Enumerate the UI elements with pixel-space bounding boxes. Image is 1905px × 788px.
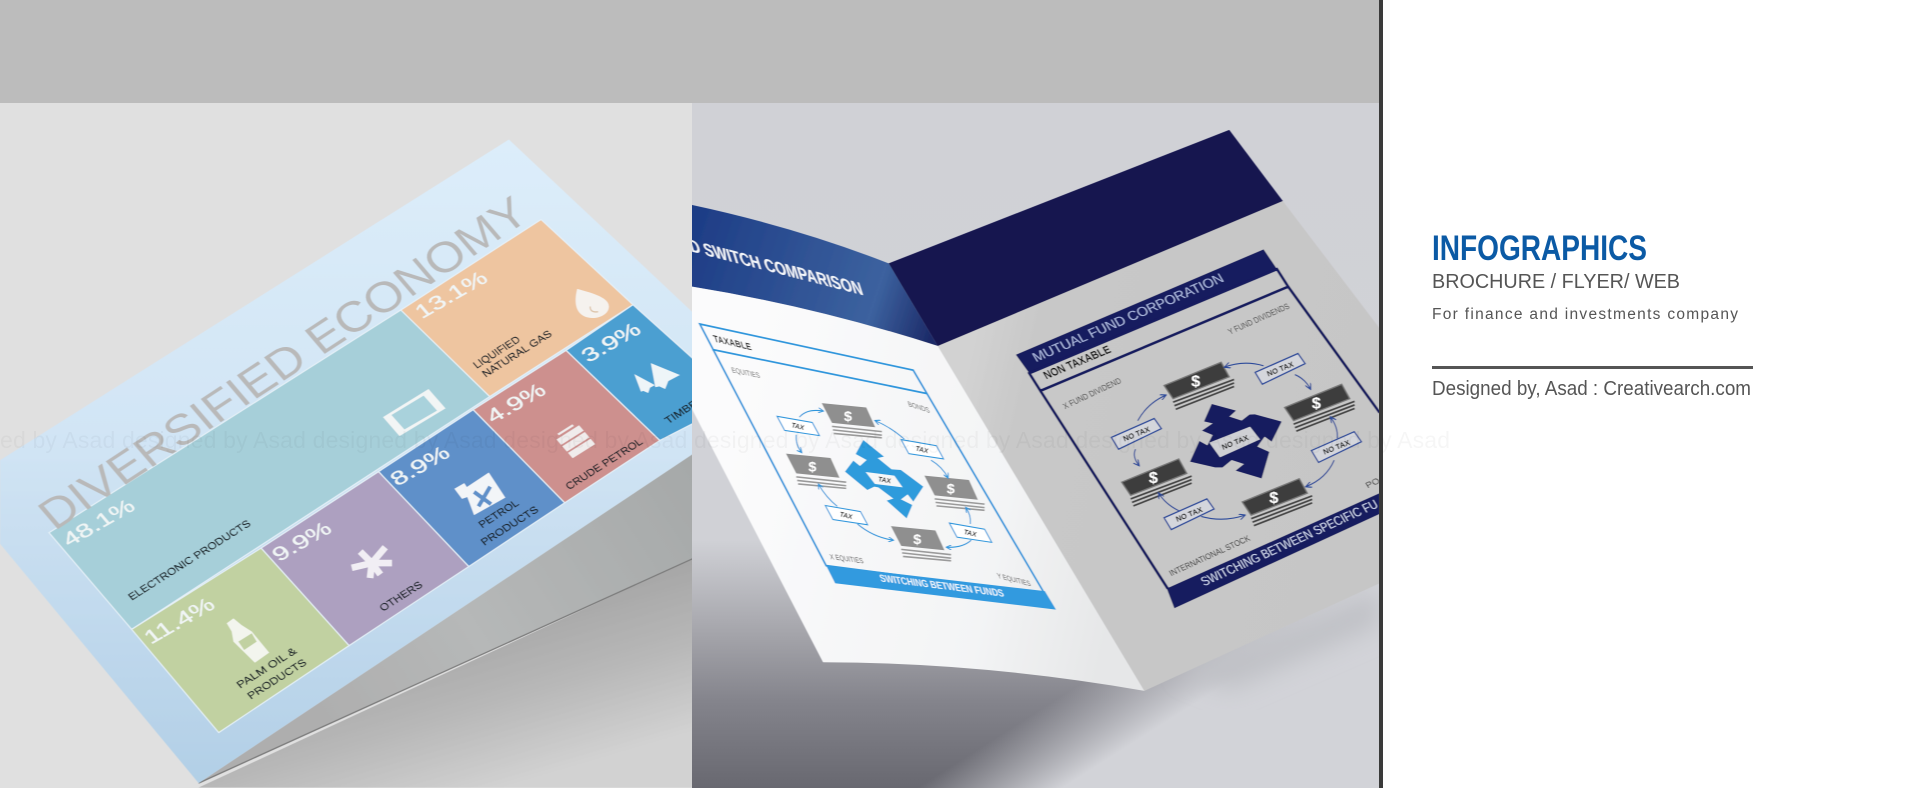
money stack 3 xyxy=(924,476,985,510)
center blue arrows: TAX xyxy=(877,476,892,485)
dark money stack 2: $ xyxy=(1312,395,1321,412)
left blue header band xyxy=(690,205,938,346)
icon: trees xyxy=(634,363,680,393)
label natural gas: NATURAL GAS xyxy=(480,329,555,380)
vertical divider xyxy=(1379,0,1383,788)
header band xyxy=(1016,249,1277,373)
tile: liquified natural gas xyxy=(401,219,633,397)
dark money stack 2 xyxy=(1285,384,1355,431)
money stack 1: $ xyxy=(844,409,852,425)
money stack 4: $ xyxy=(913,532,921,548)
no tax box 2 xyxy=(1255,353,1305,384)
diagram: taxable switching between funds xyxy=(700,324,1056,610)
tax boxes xyxy=(777,416,992,542)
no tax box 3 xyxy=(1164,499,1214,530)
money stack 1 xyxy=(822,403,882,438)
left page xyxy=(690,286,1144,691)
value 48.1%: 48.1% xyxy=(58,495,140,551)
brochure card xyxy=(0,140,699,783)
panel: mutual fund brochure xyxy=(686,103,1381,788)
underside leaf of the card xyxy=(199,450,699,783)
value 9.9%: 9.9% xyxy=(267,518,337,566)
left band title: D SWITCH COMPARISON xyxy=(686,236,866,300)
tile: others xyxy=(261,472,469,646)
dark money stack 1: $ xyxy=(1191,374,1200,390)
fold line xyxy=(199,556,699,783)
money stacks xyxy=(786,403,985,561)
floor shadow fade xyxy=(692,480,1379,788)
icon: gas drop xyxy=(576,289,609,318)
label crude petrol: CRUDE PETROL xyxy=(564,437,645,492)
value 3.9%: 3.9% xyxy=(577,319,646,367)
money stack 4 xyxy=(891,526,951,561)
dark money stack 1 xyxy=(1164,362,1234,409)
label y equities: Y EQUITIES xyxy=(996,571,1032,588)
footer text: SWITCHING BETWEEN SPECIFIC FU xyxy=(1198,497,1381,589)
money stack 3: $ xyxy=(947,482,955,498)
tile: timber xyxy=(566,305,699,440)
no tax box 4 xyxy=(1311,432,1361,462)
dark money stack 4: $ xyxy=(1269,490,1278,507)
panel: diversified economy brochure xyxy=(0,103,708,788)
footer band xyxy=(826,566,1056,610)
tile: electronic products xyxy=(49,310,490,629)
no tax arrows xyxy=(1134,363,1337,519)
tax box 1: TAX xyxy=(791,422,805,432)
footer band xyxy=(1167,493,1380,608)
no tax box 1 xyxy=(1111,418,1161,449)
label palm products: PRODUCTS xyxy=(245,657,309,702)
tax box 2: TAX xyxy=(915,445,930,455)
description: For finance and investments company xyxy=(1432,306,1738,323)
label products: PRODUCTS xyxy=(479,505,541,548)
no tax box 3: NO TAX xyxy=(1174,505,1204,524)
dark money stack 3 xyxy=(1122,459,1192,506)
icon: bottle xyxy=(227,618,269,663)
footer text: SWITCHING BETWEEN FUNDS xyxy=(878,573,1006,600)
label y fund dividends: Y FUND DIVIDENDS xyxy=(1226,302,1291,336)
header text: MUTUAL FUND CORPORATION xyxy=(1030,271,1227,365)
label timber: TIMBER xyxy=(663,394,708,426)
tax box 3: TAX xyxy=(839,511,854,521)
floor shadow xyxy=(199,556,699,788)
tax box 4: TAX xyxy=(963,529,978,539)
no tax boxes xyxy=(1111,353,1361,530)
tile labels xyxy=(126,329,708,702)
tax arrows xyxy=(796,410,971,547)
heading non taxable: NON TAXABLE xyxy=(1041,343,1113,382)
label international stock: INTERNATIONAL STOCK xyxy=(1167,534,1252,578)
designer credit: Designed by, Asad : Creativearch.com xyxy=(1432,378,1751,400)
no tax box 2: NO TAX xyxy=(1265,360,1295,378)
icon: barrel xyxy=(554,422,595,458)
label electronic products: ELECTRONIC PRODUCTS xyxy=(126,519,253,603)
subheading: BROCHURE / FLYER/ WEB xyxy=(1432,270,1680,293)
tax box 2 xyxy=(901,440,944,459)
top grey band xyxy=(0,0,1379,103)
tax box 1 xyxy=(777,416,819,436)
watermark: ed by Asad designed by Asad designed by Asad designed by Asad designed by Asad designed by Asad designed by Asad designed by Asad xyxy=(0,427,1450,453)
no tax box 1: NO TAX xyxy=(1122,425,1151,443)
center navy arrows: NO TAX xyxy=(1220,433,1250,452)
label palm oil: PALM OIL & xyxy=(235,646,300,691)
divider rule xyxy=(1432,366,1753,369)
right navy header band xyxy=(889,130,1283,346)
icon: phone xyxy=(383,389,446,436)
heading taxable: TAXABLE xyxy=(712,334,753,353)
center blue arrows xyxy=(845,440,923,518)
tax box 4 xyxy=(949,523,992,542)
non taxable row and frame xyxy=(1029,269,1380,589)
value 13.1%: 13.1% xyxy=(410,267,493,323)
dark money stack 3: $ xyxy=(1149,470,1158,487)
label liquified: LIQUIFIED xyxy=(471,334,523,371)
value 8.9%: 8.9% xyxy=(386,442,455,490)
no tax box 4: NO TAX xyxy=(1322,438,1351,457)
label bonds: BONDS xyxy=(907,400,931,415)
right grey page xyxy=(938,201,1380,691)
icon: jerrycan xyxy=(454,473,505,515)
label x equities: X EQUITIES xyxy=(828,552,865,565)
tile: petrol products xyxy=(379,410,565,567)
money stack 2: $ xyxy=(808,460,816,476)
title: diversified economy: DIVERSIFIED ECONOMY xyxy=(29,188,538,539)
tax box 3 xyxy=(825,505,868,525)
cropped label: PO xyxy=(1364,476,1381,490)
tile: crude petrol xyxy=(473,350,660,503)
label x fund dividend: X FUND DIVIDEND xyxy=(1061,376,1123,411)
label petrol: PETROL xyxy=(477,498,521,530)
treemap xyxy=(49,219,699,733)
heading: infographics: INFOGRAPHICS xyxy=(1432,229,1647,268)
percentages xyxy=(58,267,646,649)
icon: asterisk xyxy=(352,547,392,578)
frame xyxy=(700,324,1045,594)
dark money stack 4 xyxy=(1242,479,1312,526)
value 4.9%: 4.9% xyxy=(482,379,551,428)
label others: OTHERS xyxy=(378,580,425,614)
money stack 2 xyxy=(786,454,846,488)
money stacks xyxy=(1122,362,1355,526)
tile: palm oil xyxy=(132,548,349,733)
panel: project text xyxy=(1432,229,1753,400)
floor shadow under brochure xyxy=(692,480,1379,788)
value 11.4%: 11.4% xyxy=(139,594,220,649)
label equities: EQUITIES xyxy=(730,366,761,380)
diagram: non taxable switching between specific funds xyxy=(1016,249,1381,608)
center navy arrows xyxy=(1190,404,1282,478)
right floor shadow xyxy=(1180,590,1379,690)
